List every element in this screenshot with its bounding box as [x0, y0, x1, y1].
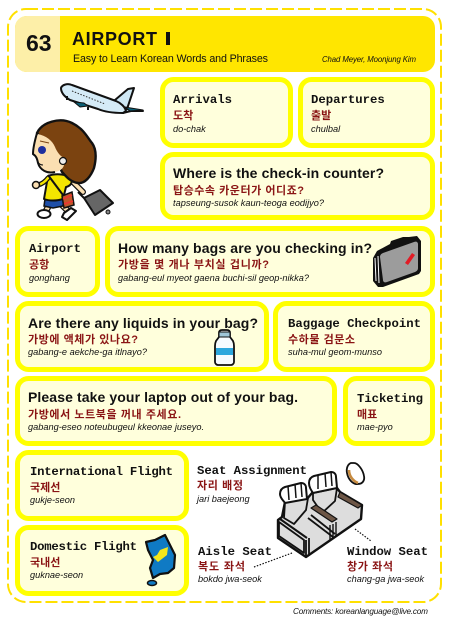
- text: seat assignment: jari baejeong: [195, 494, 251, 504]
- panel: airport: 공항: [29, 257, 49, 271]
- text: aisle seat: 복도 좌석: [198, 560, 245, 573]
- panel: baggage checkpoint: Baggage Checkpoint: [288, 317, 421, 331]
- panel: baggage checkpoint: suha-mul geom-munso: [288, 347, 382, 357]
- shorts: [44, 198, 64, 208]
- panel: international flight: [18, 452, 186, 518]
- panel: ticketing: [346, 378, 432, 444]
- illustration: airplane seats and window: [278, 463, 364, 557]
- icon: airplane: [61, 84, 143, 113]
- panel: domestic flight: Domestic Flight: [30, 540, 137, 554]
- title: AIRPORT: [72, 29, 157, 49]
- legs: [45, 205, 69, 213]
- subtitle: Easy to Learn Korean Words and Phrases: [73, 53, 268, 65]
- text: seat assignment: Seat Assignment: [197, 464, 307, 478]
- icon: traveller with suitcase: [32, 120, 113, 220]
- panel: airport: Airport: [29, 242, 81, 256]
- panel: check-in counter: [162, 154, 432, 218]
- title numeral: [166, 32, 170, 45]
- left front panel: [279, 522, 304, 553]
- hair: [37, 120, 96, 183]
- header banner: [15, 16, 435, 72]
- panel: liquids: Are there any liquids in your bag?: [28, 315, 258, 331]
- panel: laptop: gabang-eseo noteubugeul kkeonae juseyo.: [28, 422, 204, 432]
- panel: airport: [18, 228, 98, 294]
- left headrest: [280, 483, 307, 503]
- text: window seat: chang-ga jwa-seok: [347, 574, 425, 584]
- panel: arrivals: Arrivals: [173, 93, 232, 107]
- panel: international flight: gukje-seon: [30, 495, 75, 505]
- panel: international flight: 국제선: [30, 480, 60, 494]
- suitcase: [78, 190, 113, 215]
- seat silhouette: [278, 488, 362, 557]
- right backrest: [313, 488, 337, 513]
- panel: arrivals: [162, 80, 290, 146]
- panel: airport: gonghang: [29, 273, 71, 283]
- panel: domestic flight: 국내선: [30, 555, 60, 569]
- text: window seat: Window Seat: [347, 545, 428, 559]
- left backrest: [284, 498, 308, 524]
- panel: domestic flight: guknae-seon: [30, 570, 83, 580]
- panel: departures: 출발: [311, 109, 331, 122]
- right armrest: [338, 492, 362, 508]
- panel: ticketing: 매표: [357, 407, 377, 421]
- panel: departures: chulbal: [311, 124, 341, 134]
- icon: map of Korea: [146, 535, 175, 586]
- panel: arrivals: do-chak: [173, 124, 206, 134]
- leader line: aisle seat: [254, 553, 292, 567]
- shirt: [44, 174, 72, 200]
- panel: laptop: [18, 378, 334, 444]
- right arm: [71, 180, 83, 192]
- panel: ticketing: Ticketing: [357, 392, 423, 406]
- panel: check-in counter: Where is the check-in counter?: [173, 165, 384, 181]
- text: seat assignment: 자리 배정: [197, 478, 243, 492]
- icon: suitcase: [373, 236, 421, 287]
- authors: Chad Meyer, Moonjung Kim: [322, 55, 416, 64]
- panel: arrivals: 도착: [173, 108, 193, 122]
- text: aisle seat: Aisle Seat: [198, 545, 272, 559]
- text: window seat: 창가 좌석: [347, 559, 393, 573]
- panel: bags checking in: gabang-eul myeot gaena buchi-sil geop-nikka?: [118, 273, 310, 283]
- text: aisle seat: bokdo jwa-seok: [198, 574, 262, 584]
- panel: international flight: International Flight: [30, 465, 173, 479]
- panel: domestic flight: [18, 528, 186, 594]
- face: [33, 134, 65, 173]
- panel: bags checking in: 가방을 몇 개나 부치실 겁니까?: [118, 257, 269, 271]
- airplane window: [347, 463, 364, 484]
- shoulder bag: [48, 175, 63, 195]
- panel: check-in counter: tapseung-susok kaun-teoga eodijyo?: [173, 198, 325, 208]
- leader line: window seat: [355, 529, 371, 541]
- lesson number: 63: [26, 30, 52, 56]
- panel: bags checking in: How many bags are you checking in?: [118, 240, 372, 256]
- panel: departures: [300, 80, 432, 146]
- panel: laptop: 가방에서 노트북을 꺼내 주세요.: [28, 407, 181, 421]
- panel: laptop: Please take your laptop out of your bag.: [28, 389, 298, 405]
- panel: departures: Departures: [311, 93, 385, 107]
- divider stripes: [330, 522, 336, 541]
- centre armrest: [311, 505, 337, 522]
- right headrest: [309, 472, 337, 493]
- panel: liquids: gabang-e aekche-ga itlnayo?: [28, 347, 148, 357]
- comments line: Comments: koreanlanguage@live.com: [293, 607, 428, 616]
- text: window seat: [347, 545, 428, 584]
- earring: [60, 158, 66, 164]
- text: seat assignment: [195, 464, 307, 504]
- panel: baggage checkpoint: 수하물 검문소: [288, 333, 355, 346]
- panel: ticketing: mae-pyo: [357, 422, 393, 432]
- panel: liquids: [18, 304, 266, 370]
- left arm: [38, 178, 48, 185]
- icon: water bottle: [215, 330, 234, 365]
- panel: check-in counter: 탑승수속 카운터가 어디죠?: [173, 183, 304, 197]
- panel: liquids: 가방에 액체가 있나요?: [28, 332, 138, 346]
- panel: bags checking in: [108, 228, 432, 294]
- text: aisle seat: [198, 545, 272, 584]
- panel: baggage checkpoint: [276, 304, 432, 370]
